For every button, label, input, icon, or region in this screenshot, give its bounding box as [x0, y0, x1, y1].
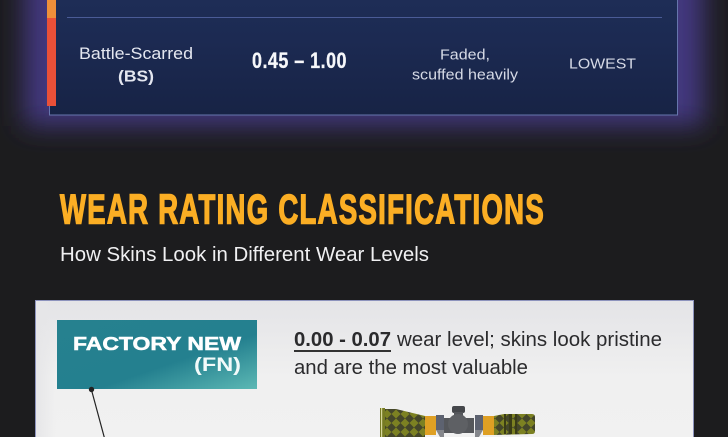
- subheading: How Skins Look in Different Wear Levels: [60, 244, 429, 266]
- description text: and are the most valuable: [294, 357, 528, 379]
- badge: factory new: FACTORY NEW: [73, 334, 241, 354]
- row label: Battle-Scarred: (BS): [118, 68, 154, 86]
- row label: Battle-Scarred: Battle-Scarred: [79, 45, 193, 63]
- badge: factory new: (FN): [194, 355, 241, 376]
- description text: [294, 329, 662, 379]
- row label: Battle-Scarred: [79, 45, 193, 86]
- worn texture: [36, 301, 56, 437]
- badge: factory new: [57, 320, 257, 389]
- value rating: LOWEST: [569, 56, 636, 72]
- appearance description: Faded,: [440, 46, 490, 64]
- icon: rifle scope: [380, 406, 535, 437]
- wear range value: 0.45 – 1.00: [252, 48, 347, 73]
- description text: 0.00 - 0.07: [294, 329, 391, 351]
- panel: wear table: [47, 0, 678, 115]
- purple glow behind table: [24, 0, 704, 126]
- table row divider: [67, 17, 662, 18]
- description text: wear level; skins look pristine: [396, 329, 662, 351]
- callout line: [89, 387, 105, 437]
- appearance description: [412, 46, 519, 84]
- panel: factory new: [36, 300, 694, 437]
- appearance description: scuffed heavily: [412, 66, 519, 84]
- wear colour stripe: [47, 0, 56, 106]
